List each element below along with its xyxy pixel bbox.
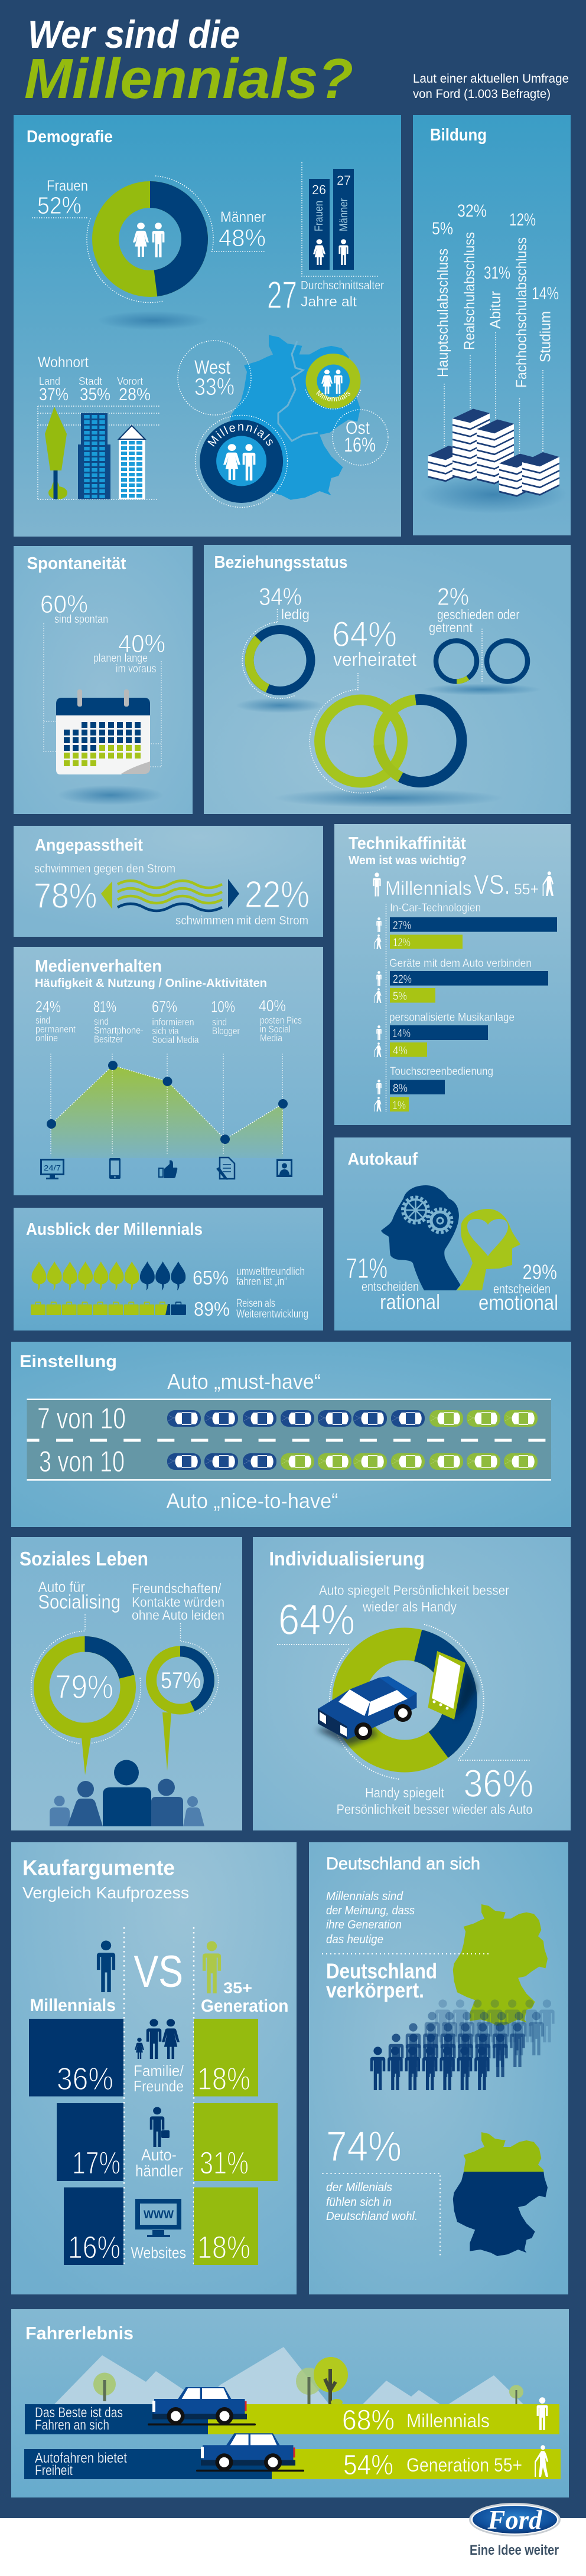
text: Deutschland verkörpert: Deutschland [326, 1959, 437, 1983]
stat: 10% blogger [211, 998, 240, 1037]
icon: monitor 24/7 [41, 1159, 64, 1179]
callout: Ost 16%: 16% [344, 434, 376, 456]
heading: Deutschland an sich: Deutschland an sich [326, 1854, 480, 1874]
heading: Autokauf: Autokauf [347, 1150, 418, 1169]
bars: In-Car-Technologien: In-Car-Technologien [390, 902, 481, 914]
stat: 65% umweltfreundlich [193, 1266, 305, 1289]
rotated education labels: Abitur [487, 291, 504, 329]
bars: Geräte verbinden: 22% [393, 973, 412, 986]
badge: Millennials east: Millennials [316, 390, 351, 401]
bar: Das Fahren an sich: Das Beste ist das [35, 2405, 123, 2421]
title: Millennials? [24, 47, 353, 110]
bars: Touchscreenbedienung: 8% [393, 1083, 408, 1095]
label: Auto für Socialising [38, 1579, 121, 1631]
heading: Ausblick: Ausblick der Millennials [26, 1220, 203, 1239]
text: average age 27 [267, 273, 384, 316]
stat: 29% emotional: emotional [478, 1290, 558, 1315]
bar: Freiheit: 54% [343, 2450, 393, 2481]
row: 3 von 10: 3 von 10 [39, 1445, 125, 1478]
panel: Kaufargumente [11, 1842, 297, 2294]
stat: 24% online: sind [35, 1015, 50, 1026]
icon: thumbs up [159, 1160, 177, 1178]
percent labels: 32% [457, 201, 487, 221]
stat: 65% umweltfreundlich: 65% [193, 1267, 229, 1289]
stat: 36% Handy: Persönlichkeit besser wieder als Auto [337, 1802, 533, 1817]
map: Germany east west [229, 335, 360, 500]
bars: Touchscreenbedienung: 1% [392, 1100, 406, 1112]
icon: book stack Hauptschule [428, 446, 465, 482]
tagline: Eine Idee weiter [470, 2542, 559, 2558]
row: 3 von 10 [39, 1445, 538, 1478]
heading: Wohnort with shares: 35% [80, 385, 110, 404]
text: feel good: der Millenials [326, 2181, 392, 2194]
bar: Freiheit [24, 2445, 561, 2481]
stat: 22%: 22% [245, 873, 310, 916]
road [27, 1399, 551, 1480]
stat: 64% Auto: 64% [278, 1596, 355, 1644]
icon: crowd of people [370, 1999, 555, 2090]
rotated education labels [435, 232, 554, 388]
stat: 36% Handy: Handy spiegelt [365, 1785, 445, 1800]
callout: West 33% [178, 341, 251, 415]
versus header [30, 1940, 288, 2016]
stat: 78%: 78% [34, 876, 97, 916]
Ford logo [469, 2503, 561, 2536]
icon: portrait [276, 1159, 292, 1177]
icon: smartphone [109, 1158, 121, 1179]
stat: 64% Auto [277, 1583, 509, 1645]
stat: 67% social media [152, 998, 199, 1045]
versus header: Generation [201, 1996, 288, 2016]
rotated education labels: Hauptschulabschluss [435, 249, 451, 377]
heading: Einstellung: Einstellung [19, 1352, 117, 1371]
stat: 40% pics [259, 997, 302, 1044]
panel: Ausblick der Millennials [14, 1208, 323, 1331]
icon: monitor 24/7: 24/7 [44, 1163, 61, 1172]
text: Millennials opinion: der Meinung, dass [326, 1904, 415, 1917]
label: nice-to-have: Auto „nice-to-have“ [167, 1489, 338, 1513]
subtitle [413, 72, 569, 101]
heading: Medienverhalten: Häufigkeit & Nutzung / Online-Aktivitäten [35, 977, 267, 990]
text: average age 27: 27 [267, 273, 297, 316]
panel: Demografie [14, 115, 401, 537]
stat: 89% Reisen: 89% [194, 1298, 230, 1320]
bar: Das Fahren an sich [25, 2397, 559, 2436]
bars: Touchscreenbedienung: Touchscreenbedienung [390, 1065, 493, 1078]
bars: Musikanlage: 4% [393, 1045, 408, 1057]
donut shadow [97, 311, 209, 330]
bars: Musikanlage: personalisierte Musikanlage [389, 1012, 515, 1024]
bar: Das Fahren an sich: Millennials [406, 2410, 490, 2431]
stat: 81% smartphone: Besitzer [94, 1034, 123, 1045]
comparison: Websites: 18% [197, 2230, 250, 2266]
bar chart: average age: 26 [312, 182, 326, 197]
label: Auto für Socialising: Socialising [38, 1591, 121, 1613]
bars: In-Car-Technologien: 27% [393, 920, 411, 932]
row: 7 von 10 [37, 1402, 538, 1435]
bars: Musikanlage [375, 1012, 515, 1057]
text: Millennials opinion: ihre Generation [326, 1918, 402, 1931]
label: Freundschaften: Kontakte würden [132, 1594, 224, 1610]
versus header: Millennials [30, 1996, 116, 2015]
comparison: Familie/Freunde [29, 2019, 258, 2097]
bars: Touchscreenbedienung [375, 1065, 493, 1112]
bars: In-Car-Technologien: 12% [393, 937, 411, 949]
heading: Wohnort with shares: Stadt [79, 375, 102, 387]
stat: 67% social media: 67% [152, 998, 177, 1015]
stat: 10% blogger: 10% [211, 998, 235, 1015]
heading: Soziales Leben: Soziales Leben [19, 1548, 148, 1570]
comparison: Familie/Freunde: 18% [197, 2061, 250, 2097]
pictogram: suitcases 89% [31, 1302, 186, 1315]
heading: Technikaffinität: Wem ist was wichtig? [349, 854, 467, 867]
stat: 64% Auto: wieder als Handy [362, 1599, 457, 1614]
badge: Millennials west [195, 414, 288, 508]
comparison: Websites: WWW [144, 2209, 174, 2221]
stat: 64% verheiratet: 64% [332, 614, 397, 654]
icon: car Generation 55+ [196, 2433, 304, 2472]
donut chart: 57%: 57% [161, 1668, 201, 1694]
rotated education labels: Realschulabschluss [461, 232, 478, 350]
icon: document and pen [216, 1158, 235, 1180]
row: 7 von 10: 7 von 10 [37, 1402, 126, 1435]
label: Frauen 52% [32, 178, 88, 219]
stat: 65% umweltfreundlich: umweltfreundlich [236, 1266, 305, 1278]
stat: 24% online [35, 998, 76, 1044]
waves [118, 881, 222, 911]
stat: 40% planen: 40% [118, 630, 165, 658]
stat: 2% geschieden [429, 583, 520, 635]
bar chart: average age: Männer [338, 198, 350, 231]
stat: 40% pics: Media [260, 1032, 282, 1044]
stat: 71% rational: rational [380, 1290, 440, 1314]
heading: Individualisierung: Individualisierung [269, 1548, 425, 1570]
heading: Wohnort with shares: 37% [39, 385, 69, 404]
heading: Kaufargumente: Kaufargumente [22, 1856, 175, 1879]
icon: suburb house [119, 426, 145, 499]
arrow: navy right [228, 879, 239, 908]
bars: Geräte verbinden [375, 957, 548, 1003]
label: Auto für Socialising: Auto für [38, 1579, 85, 1596]
stat: 60% spontan: 60% [40, 590, 88, 619]
icon: rational head with gears [381, 1185, 461, 1290]
stat: 81% smartphone: Smartphone- [94, 1025, 144, 1036]
stat: 67% social media: Social Media [152, 1034, 199, 1045]
icon: tree [45, 407, 67, 499]
stat: 2% geschieden: getrennt [429, 620, 473, 635]
icon: car Millennials [148, 2387, 256, 2425]
rotated education labels: Studium [538, 311, 554, 362]
comparison: Websites: Websites [131, 2244, 186, 2262]
comparison: Familie/Freunde: Familie/ [134, 2062, 184, 2080]
percent labels: 12% [509, 210, 536, 230]
heading: Medienverhalten [35, 957, 267, 990]
stat: 36% Handy [337, 1760, 533, 1817]
stat: 81% smartphone [93, 998, 144, 1045]
comparison: Familie/Freunde: 36% [57, 2061, 113, 2097]
small rings shadow [423, 684, 541, 695]
heading: Bildung: Bildung [430, 126, 487, 145]
heading: Angepasstheit: Angepasstheit [35, 836, 143, 855]
panel: Beziehungsstatus [204, 545, 571, 814]
legend: Millennials vs 55+: Millennials [385, 877, 471, 899]
legend: Millennials vs 55+: 55+ [514, 880, 539, 898]
ring chart: geschieden [436, 641, 528, 681]
bar chart: average age [302, 162, 378, 276]
bars: In-Car-Technologien [375, 902, 557, 949]
stat: 24% online: online [35, 1032, 58, 1044]
stat: 40% planen [93, 630, 165, 675]
icon: city tower [78, 413, 110, 499]
comparison: Familie/Freunde: Freunde [134, 2077, 184, 2095]
comparison: Websites [64, 2188, 258, 2266]
heading: Medienverhalten: Medienverhalten [35, 957, 162, 976]
legend: Millennials vs 55+ [373, 869, 554, 900]
heading: Wohnort with shares: Wohnort [38, 354, 89, 371]
pictogram: leaves 65% [32, 1261, 185, 1290]
stat: 2% geschieden: 2% [437, 583, 469, 610]
title: Wer sind die [28, 12, 240, 56]
callout: Ost 16%: Ost [346, 417, 370, 438]
stat: 40% pics: in Social [260, 1024, 291, 1035]
donut chart: 79%: 79% [55, 1668, 113, 1706]
ring shadow [236, 698, 324, 713]
calendar shadow [57, 785, 164, 805]
label: Freundschaften: Freundschaften/ [132, 1581, 222, 1596]
panel: Einstellung [11, 1342, 571, 1527]
heading: Wohnort with shares [38, 354, 151, 404]
heading: Technikaffinität: Technikaffinität [349, 834, 466, 853]
label: must-have: Auto „must-have“ [167, 1369, 321, 1394]
heading: Wohnort with shares: 28% [119, 385, 151, 404]
stat: 81% smartphone: 81% [93, 998, 116, 1015]
stat: 60% spontan [40, 590, 108, 626]
heading: Technikaffinität [349, 834, 467, 867]
mountains [54, 2347, 523, 2404]
legend: Millennials vs 55+: VS. [474, 869, 510, 900]
comparison: Autohändler [57, 2103, 278, 2181]
subtitle: von Ford (1.003 Befragte) [413, 87, 551, 101]
Ford logo: Ford [487, 2505, 542, 2535]
stat: 29% emotional: 29% [522, 1261, 557, 1284]
subtitle: Laut einer aktuellen Umfrage [413, 72, 569, 86]
icon: group of people [50, 1760, 204, 1826]
stat: 24% online: permanent [35, 1024, 76, 1035]
stat: 34% ledig: ledig [281, 607, 310, 623]
comparison: Autohändler: 17% [72, 2146, 121, 2181]
text: Millennials opinion: das heutige [326, 1933, 383, 1946]
text: average age 27: Jahre alt [301, 294, 357, 310]
stat: 89% Reisen [194, 1297, 308, 1320]
donut chart: gender [87, 176, 213, 303]
stat: 67% social media: sich via [152, 1025, 179, 1037]
panel: Medienverhalten [14, 947, 323, 1195]
stat: 40% pics: posten Pics [260, 1015, 302, 1026]
panel: Angepasstheit [14, 826, 323, 937]
panel: Spontaneität [14, 546, 193, 814]
bars: Musikanlage: 14% [392, 1028, 411, 1040]
footer white strip [0, 2518, 586, 2576]
stat: 34% ledig [259, 583, 310, 623]
label: Männer 48%: 48% [219, 224, 266, 251]
panel: Bildung [413, 115, 571, 535]
heading: Wohnort with shares: Vorort [117, 375, 143, 387]
stacks shadow [419, 476, 567, 514]
stat: 64% verheiratet: verheiratet [333, 649, 416, 670]
heading: Demografie: Demografie [27, 128, 113, 146]
map: Germany split [453, 2132, 548, 2256]
bar: Das Fahren an sich: 68% [342, 2405, 395, 2436]
donut chart: 57% [151, 1642, 219, 1771]
stat: 40% planen: planen lange [93, 652, 148, 665]
label: Männer 48% [211, 209, 266, 251]
stat: 89% Reisen: Weiterentwicklung [236, 1308, 308, 1320]
stat: 24% online: 24% [35, 998, 61, 1015]
stat: 74%: 74% [326, 2123, 402, 2170]
stat: 64% Auto: Auto spiegelt Persönlichkeit besser [319, 1583, 509, 1598]
badge: Millennials west: Millennials [207, 424, 273, 447]
percent labels: 31% [484, 263, 510, 283]
icon: emotional head with heart [457, 1209, 520, 1290]
text: feel good: fühlen sich in [326, 2196, 392, 2209]
heading: Kaufargumente [22, 1856, 189, 1902]
comparison: Autohändler: händler [135, 2162, 183, 2180]
donut chart: 79% [31, 1631, 141, 1775]
text: Millennials opinion [326, 1890, 415, 1946]
stat: 10% blogger: sind [212, 1016, 227, 1028]
label: Frauen 52%: 52% [37, 192, 82, 219]
heading: Kaufargumente: Vergleich Kaufprozess [22, 1884, 189, 1902]
text: Deutschland verkörpert [326, 1959, 437, 2002]
icon: book stack Fachhochschule [499, 453, 536, 497]
badge: Millennials east [305, 354, 362, 410]
bar chart: average age: Frauen [313, 201, 325, 231]
label: Freundschaften: ohne Auto leiden [132, 1607, 224, 1623]
label: gegen den Strom: schwimmen gegen den Strom [34, 862, 175, 875]
text: Millennials opinion: Millennials sind [326, 1890, 403, 1903]
stat: 29% emotional [478, 1261, 558, 1315]
icon: car isometric [316, 1676, 417, 1746]
text: average age 27: Durchschnittsalter [301, 279, 384, 292]
map: Germany green [453, 1904, 548, 2026]
donut chart: Auto vs Handy [330, 1624, 484, 1779]
text: feel good [326, 2181, 418, 2223]
panel: Deutschland an sich [309, 1842, 568, 2294]
heading: Beziehungsstatus: Beziehungsstatus [214, 553, 347, 572]
panel: Fahrerlebnis [11, 2309, 569, 2497]
icon: book stack Studium [522, 452, 559, 496]
comparison: Websites: 16% [68, 2230, 121, 2266]
stat: 29% emotional: entscheiden [493, 1282, 551, 1296]
stat: 2% geschieden: geschieden oder [437, 607, 520, 622]
stat: 71% rational: 71% [346, 1253, 388, 1284]
percent labels [432, 201, 559, 303]
bars: Geräte verbinden: Geräte mit dem Auto verbinden [389, 957, 532, 970]
area chart [47, 1054, 288, 1158]
stat: 89% Reisen: Reisen als [236, 1297, 275, 1310]
title [24, 12, 353, 110]
bar: Freiheit: Autofahren bietet [35, 2450, 127, 2466]
stat: 64% verheiratet [332, 614, 416, 692]
stat: 71% rational: entscheiden [362, 1279, 419, 1294]
stat: 67% social media: informieren [152, 1016, 194, 1028]
stat: 34% ledig: 34% [259, 583, 302, 610]
bars: Geräte verbinden: 5% [393, 990, 407, 1003]
icon: book stack Abitur [477, 419, 514, 485]
comparison: Autohändler: 31% [200, 2146, 249, 2181]
stat: 40% pics: 40% [259, 997, 286, 1015]
label: mit dem Strom: schwimmen mit dem Strom [175, 914, 308, 927]
icon: couple [133, 223, 164, 257]
stat: 71% rational [346, 1253, 440, 1314]
bar: Freiheit: Freiheit [35, 2463, 73, 2479]
callout: Ost 16% [333, 410, 388, 465]
bar chart: average age: 27 [337, 173, 351, 188]
stat: 36% Handy: 36% [463, 1761, 533, 1805]
rings shadow [274, 789, 504, 808]
heading: Spontaneität: Spontaneität [27, 554, 126, 573]
panel: Technikaffinität [334, 824, 571, 1125]
panel: Soziales Leben [11, 1537, 242, 1830]
trees [93, 2357, 523, 2406]
stat: 60% spontan: sind spontan [54, 613, 108, 626]
versus header: 35+ [223, 1979, 252, 1996]
bar: Das Fahren an sich: Fahren an sich [35, 2417, 109, 2433]
ring chart: ledig [242, 622, 311, 698]
versus header: VS [134, 1947, 183, 1997]
label: Frauen 52%: Frauen [47, 178, 88, 194]
stat: 65% umweltfreundlich: fahren ist „in“ [236, 1276, 287, 1288]
arrow: green left [101, 881, 112, 909]
panel: Autokauf [334, 1137, 571, 1331]
stat: 10% blogger: Blogger [212, 1025, 240, 1037]
icon: smartphone isometric [428, 1651, 477, 1719]
label: Freundschaften [132, 1581, 224, 1642]
text: Deutschland verkörpert: verkörpert. [326, 1978, 424, 2002]
rotated education labels: Fachhochschulabschluss [513, 237, 530, 388]
label: Männer 48%: Männer [220, 209, 266, 225]
bar: Freiheit: Generation 55+ [406, 2454, 522, 2476]
percent labels: 14% [532, 284, 559, 303]
heading: Fahrerlebnis: Fahrerlebnis [25, 2323, 134, 2343]
heading: Wohnort with shares: Land [39, 375, 60, 387]
text: feel good: Deutschland wohl. [326, 2210, 418, 2223]
panel: Individualisierung [253, 1537, 571, 1830]
ring chart: verheiratet [310, 689, 462, 793]
percent labels: 5% [432, 219, 453, 238]
callout: West 33%: 33% [194, 373, 235, 400]
callout: West 33%: West [194, 357, 230, 378]
icon: calendar [56, 689, 150, 774]
stat: 81% smartphone: sind [94, 1016, 109, 1027]
stat: 40% planen: im voraus [116, 663, 156, 675]
comparison: Autohändler: Auto- [141, 2146, 177, 2164]
icon: book stack Realschule [452, 408, 490, 481]
